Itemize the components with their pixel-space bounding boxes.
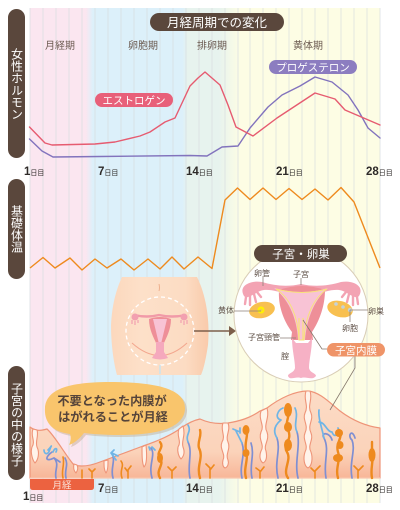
bar: menstruation period bbox=[30, 479, 94, 492]
label: estrogen bbox=[95, 93, 173, 107]
chart: basal body temperature line bbox=[30, 188, 380, 270]
day axis: top: 1日目 bbox=[24, 166, 44, 178]
bar: menstruation period: 月経 bbox=[52, 480, 72, 492]
anatomy labels: 子宮 bbox=[293, 269, 309, 279]
day axis: bottom: 14日目 bbox=[186, 483, 213, 495]
anatomy labels: 卵胞 bbox=[342, 323, 358, 333]
day axis: bottom bbox=[23, 483, 393, 503]
title bbox=[150, 13, 284, 31]
day axis: top: 28日目 bbox=[366, 166, 393, 178]
day axis: bottom: 21日目 bbox=[276, 483, 303, 495]
leader lines bbox=[234, 276, 368, 338]
callout: menstruation explanation bbox=[45, 382, 187, 447]
day axis: top: 14日目 bbox=[186, 166, 213, 178]
side label: hormones: 女性ホルモン bbox=[10, 48, 24, 120]
title: uterus and ovaries bbox=[254, 245, 347, 262]
phase labels: 月経期 bbox=[45, 39, 75, 52]
day axis: bottom: 1日目 bbox=[23, 491, 43, 503]
line: progesterone bbox=[30, 77, 380, 157]
illustration: lower abdomen bbox=[111, 277, 209, 375]
phase labels bbox=[45, 39, 323, 52]
label: progesterone: プロゲステロン bbox=[276, 62, 350, 74]
side label: basal body temperature: 基礎体温 bbox=[10, 205, 24, 253]
tissue fill and contour bbox=[30, 391, 380, 478]
phase labels: 排卵期 bbox=[197, 39, 227, 52]
line: estrogen bbox=[30, 72, 380, 145]
day axis: top bbox=[24, 166, 393, 178]
icon: small uterus bbox=[132, 314, 188, 360]
anatomy labels: 卵巣 bbox=[368, 306, 384, 316]
vagina bbox=[288, 338, 316, 378]
blood vessels: orange bbox=[62, 408, 373, 478]
label: endometrium bbox=[303, 320, 385, 410]
arrow: zoom into uterus bbox=[194, 326, 236, 336]
title: uterus and ovaries: 子宮・卵巣 bbox=[272, 247, 330, 261]
uterine cavity bbox=[274, 288, 328, 340]
title: 月経周期での変化 bbox=[167, 15, 267, 30]
blood vessels: blue bbox=[47, 432, 355, 478]
side label: basal body temperature bbox=[8, 179, 25, 279]
callout: menstruation explanation: はがれることが月経 bbox=[58, 409, 168, 424]
icon: right ovary with follicles bbox=[325, 298, 355, 320]
day axis: top: 7日目 bbox=[98, 166, 118, 178]
label: estrogen: エストロゲン bbox=[102, 95, 166, 107]
fallopian tubes bbox=[242, 282, 361, 297]
chart: hormone curves bbox=[30, 72, 380, 157]
side label: inside the uterus: 子宮の中の様子 bbox=[10, 382, 24, 467]
chart: endometrium cross-section bbox=[30, 391, 380, 478]
side label: inside the uterus bbox=[8, 366, 25, 480]
day axis: bottom: 28日目 bbox=[366, 483, 393, 495]
side label: hormones bbox=[8, 9, 25, 158]
uterine body bbox=[279, 286, 325, 340]
anatomy labels bbox=[218, 268, 384, 361]
anatomy labels: 卵管 bbox=[254, 268, 270, 278]
anatomy labels: 黄体 bbox=[218, 305, 234, 315]
icon: left ovary with corpus luteum bbox=[248, 299, 276, 321]
phase labels: 黄体期 bbox=[293, 39, 323, 52]
anatomy labels: 腟 bbox=[281, 351, 289, 361]
day axis: bottom: 7日目 bbox=[98, 483, 118, 495]
illustration: uterus bbox=[242, 282, 361, 378]
panel: uterus and ovaries bbox=[218, 248, 384, 382]
tissue folds bbox=[31, 391, 312, 473]
phase labels: 卵胞期 bbox=[128, 39, 158, 52]
callout: menstruation explanation: 不要となった内膜が bbox=[57, 393, 167, 408]
day axis: top: 21日目 bbox=[276, 166, 303, 178]
anatomy labels: 子宮頸管 bbox=[248, 332, 280, 342]
label: endometrium: 子宮内膜 bbox=[335, 344, 377, 357]
